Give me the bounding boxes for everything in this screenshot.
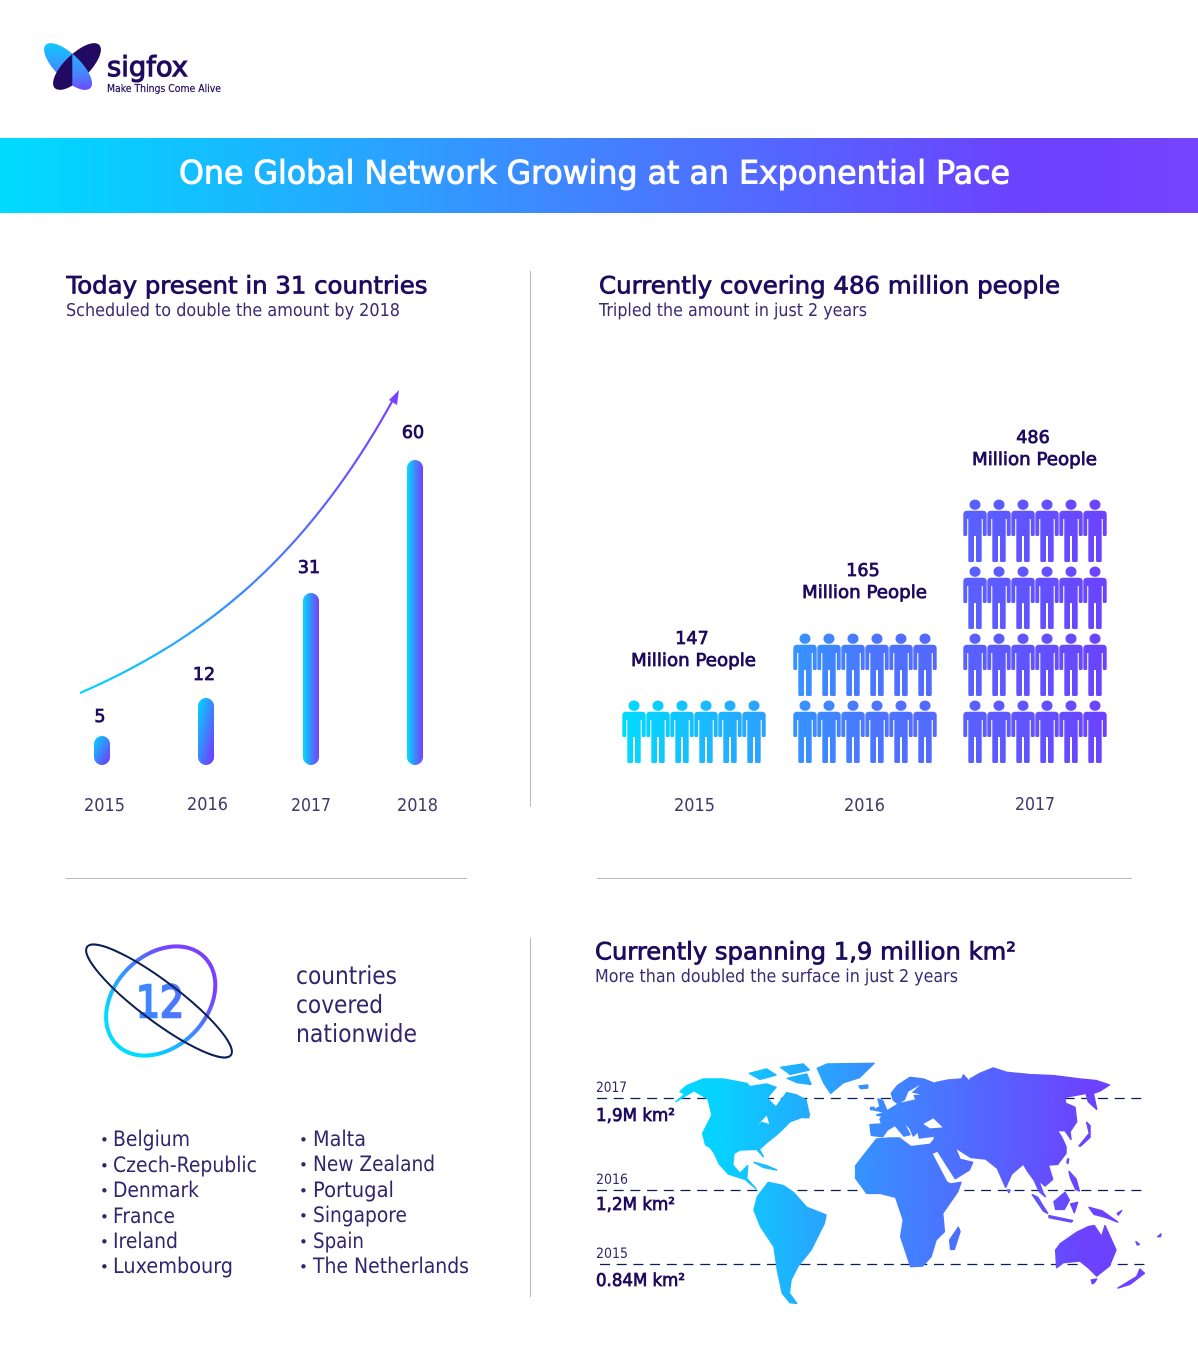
latitude dashed lines bbox=[597, 1098, 1145, 1264]
people labels: Million People bbox=[972, 450, 1097, 470]
nationwide caption bbox=[296, 961, 417, 1048]
country list left: • bbox=[100, 1131, 109, 1149]
subheading: surface: More than doubled the surface in just 2 years bbox=[595, 967, 958, 987]
map labels: 2017 bbox=[596, 1080, 627, 1096]
country list right: The Netherlands bbox=[312, 1254, 469, 1278]
country list right: • bbox=[299, 1207, 308, 1225]
nationwide caption: countries bbox=[296, 961, 397, 990]
panel: people covered bbox=[598, 272, 1110, 816]
country list right: Malta bbox=[313, 1127, 366, 1151]
heading: countries: Today present in 31 countries bbox=[65, 272, 428, 300]
people labels: 147 bbox=[675, 629, 709, 649]
bar chart: 2017 bbox=[291, 796, 331, 816]
people labels: 2017 bbox=[1015, 795, 1055, 815]
country list right: • bbox=[299, 1233, 308, 1251]
country list left: • bbox=[100, 1157, 109, 1175]
people labels: 486 bbox=[1016, 428, 1050, 448]
bar chart: 2015 bbox=[84, 796, 125, 816]
icon: orbit 12: 12 bbox=[136, 977, 184, 1028]
people labels: Million People bbox=[802, 583, 927, 603]
country list left: • bbox=[100, 1233, 109, 1251]
country list left: Belgium bbox=[113, 1127, 190, 1151]
nationwide caption: nationwide bbox=[296, 1019, 417, 1048]
subheading: people: Tripled the amount in just 2 years bbox=[598, 301, 867, 321]
bar chart: 2016 bbox=[187, 795, 228, 815]
heading: surface: Currently spanning 1,9 million km² bbox=[595, 938, 1016, 966]
map labels: 1,9M km² bbox=[596, 1106, 675, 1126]
people labels: 165 bbox=[846, 561, 880, 581]
country list left: Luxembourg bbox=[113, 1254, 233, 1278]
country list right: • bbox=[299, 1156, 308, 1174]
country list right: Portugal bbox=[313, 1178, 394, 1202]
people labels: 2015 bbox=[674, 796, 715, 816]
people pictogram bbox=[620, 495, 1110, 765]
bar chart: 12 bbox=[193, 665, 215, 685]
subheading: countries: Scheduled to double the amount by 2018 bbox=[66, 301, 400, 321]
map labels: 1,2M km² bbox=[596, 1195, 675, 1215]
map labels: 2015 bbox=[596, 1246, 628, 1262]
people labels: 2016 bbox=[844, 796, 885, 816]
arrow: growth curve bbox=[80, 390, 399, 693]
tagline: Make Things Come Alive bbox=[107, 83, 221, 95]
country list right bbox=[299, 1127, 469, 1278]
country list right: • bbox=[299, 1258, 308, 1276]
bar chart: 5 bbox=[94, 707, 106, 727]
country list left: Ireland bbox=[113, 1229, 178, 1253]
country list left: • bbox=[100, 1182, 109, 1200]
logo bbox=[44, 43, 221, 94]
country list left: • bbox=[100, 1208, 109, 1226]
bar chart: 2018 bbox=[397, 796, 438, 816]
country list left: France bbox=[113, 1204, 175, 1228]
icon: butterfly bbox=[44, 43, 101, 90]
nationwide caption: covered bbox=[296, 990, 383, 1019]
country list right: • bbox=[299, 1131, 308, 1149]
country list right: • bbox=[299, 1182, 308, 1200]
country list left: Czech-Republic bbox=[113, 1153, 257, 1177]
people labels bbox=[631, 428, 1097, 816]
country list left: Denmark bbox=[113, 1178, 200, 1202]
panel: surface covered bbox=[595, 938, 1161, 1303]
country list right: Singapore bbox=[313, 1203, 407, 1227]
brand name: sigfox bbox=[107, 50, 188, 83]
country list right: New Zealand bbox=[313, 1152, 435, 1176]
panel: nationwide countries bbox=[75, 925, 469, 1278]
map labels: 2016 bbox=[596, 1172, 628, 1188]
map labels: 0.84M km² bbox=[596, 1271, 685, 1291]
panel: countries growth bbox=[65, 272, 438, 816]
world map bbox=[676, 1063, 1161, 1303]
heading: people: Currently covering 486 million people bbox=[599, 272, 1060, 300]
title banner: One Global Network Growing at an Exponential Pace bbox=[179, 154, 1010, 192]
bar chart: 31 bbox=[298, 558, 320, 578]
country list right: Spain bbox=[313, 1229, 364, 1253]
country list left bbox=[100, 1127, 257, 1278]
title banner bbox=[0, 138, 1198, 213]
bar chart: 60 bbox=[402, 423, 424, 443]
country list left: • bbox=[100, 1258, 109, 1276]
people labels: Million People bbox=[631, 651, 756, 671]
bar chart bbox=[84, 423, 438, 816]
icon: orbit 12 bbox=[75, 925, 243, 1077]
map labels bbox=[596, 1080, 685, 1291]
